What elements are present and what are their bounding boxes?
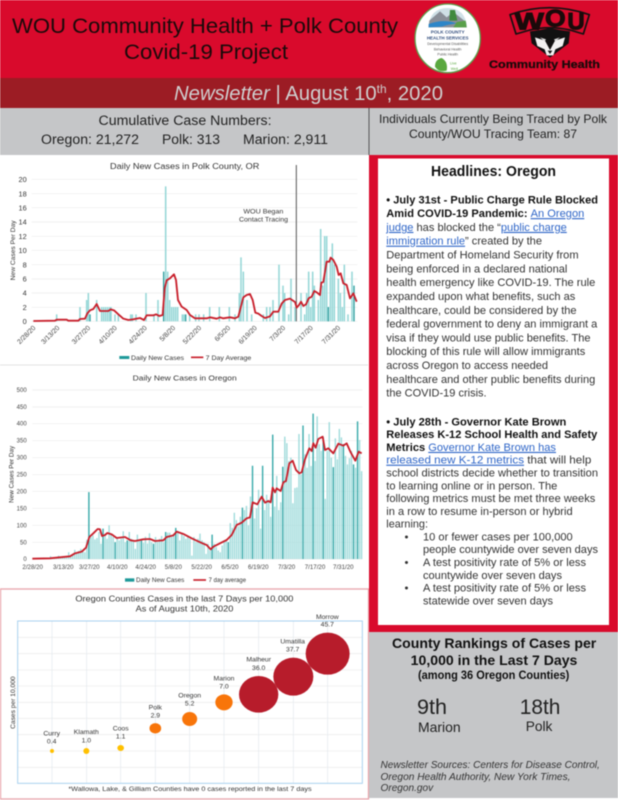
bubble chart: Oregon counties cases per 10,000: Oregon Counties Cases in the last 7 Days per 10,000 bbox=[75, 595, 294, 604]
text block: public charge rule: Amid COVID-19 Pandemic: An Oregon bbox=[386, 208, 584, 220]
panel: cumulative case numbers: Polk: 313 bbox=[162, 132, 220, 147]
line chart: daily new cases in Polk County: 7/3/20 bbox=[269, 325, 287, 343]
bar and line chart: daily new cases in Oregon: New Cases Per Day bbox=[9, 445, 16, 503]
text block: K-12 metrics: A test positivity rate of 5% or less bbox=[423, 583, 586, 595]
text block: K-12 metrics: • bbox=[404, 583, 408, 595]
text block: K-12 metrics: school districts decide whether to transition bbox=[386, 468, 598, 480]
line chart: daily new cases in Polk County: 14 bbox=[19, 218, 27, 227]
text block: public charge rule: federal government to deny an immigrant a bbox=[386, 319, 598, 331]
bubble chart: Oregon counties cases per 10,000: Polk bbox=[149, 704, 163, 711]
bar and line chart: daily new cases in Oregon: 5/22/20 bbox=[191, 564, 213, 571]
panel: individuals being traced: Individuals Currently Being Traced by Polk bbox=[379, 112, 608, 126]
text block: public charge rule: blocking of this rule will allow immigrants bbox=[386, 346, 586, 358]
bubble chart: Oregon counties cases per 10,000: 0.4 bbox=[47, 739, 57, 746]
icon: Polk County Health Services logo: HEALTH SERVICES bbox=[427, 36, 469, 41]
text block: public charge rule: Department of Homeland Security from bbox=[386, 250, 579, 262]
bar and line chart: daily new cases in Oregon: 3/27/20 bbox=[79, 564, 100, 571]
panel: cumulative case numbers: Marion: 2,911 bbox=[243, 132, 328, 147]
panel: county rankings bbox=[369, 632, 618, 798]
bar and line chart: daily new cases in Oregon: 4/10/20 bbox=[107, 564, 128, 571]
line chart: daily new cases in Polk County: Contact Tracing bbox=[239, 216, 288, 223]
title: Covid-19 Project bbox=[124, 40, 288, 64]
newsletter date band: Newsletter | August 10 bbox=[174, 82, 378, 105]
icon: WOU wolf logo: Community Health bbox=[489, 59, 600, 71]
panel: cumulative case numbers bbox=[0, 108, 369, 155]
bubble chart: Oregon counties cases per 10,000: Klamath bbox=[74, 729, 99, 736]
line chart: daily new cases in Polk County: 2 bbox=[23, 303, 27, 312]
bar and line chart: daily new cases in Oregon: 7/17/20 bbox=[305, 564, 326, 571]
line chart: daily new cases in Polk County: WOU Began bbox=[243, 208, 284, 215]
bubble chart: Oregon counties cases per 10,000: Umatilla bbox=[280, 638, 305, 645]
text block: K-12 metrics: Metrics Governor Kate Brown has bbox=[386, 442, 556, 454]
bar and line chart: daily new cases in Oregon: 400 bbox=[17, 422, 27, 428]
newsletter date band: th bbox=[377, 82, 387, 96]
line chart: daily new cases in Polk County: 6/19/20 bbox=[238, 325, 259, 346]
text block: newsletter sources bbox=[380, 759, 600, 794]
text block: public charge rule: immigration rule” created by the bbox=[386, 236, 542, 248]
line chart: daily new cases in Polk County: 7 Day Average bbox=[206, 355, 252, 362]
line chart: daily new cases in Polk County: 3/13/20 bbox=[40, 325, 62, 346]
heading: county rankings bbox=[392, 635, 597, 682]
bubble chart: Oregon counties cases per 10,000: 7.0 bbox=[219, 684, 229, 691]
icon: Polk County Health Services logo: Well bbox=[451, 67, 458, 71]
heading: headlines: Headlines: Oregon bbox=[431, 164, 556, 180]
stat: Polk rank: 18th bbox=[520, 696, 560, 719]
text block: newsletter sources: Oregon.gov bbox=[380, 782, 434, 794]
text block: public charge rule: visa if they would use public benefits. The bbox=[386, 332, 591, 344]
text block: public charge rule: expanded upon what benefits, such as bbox=[386, 291, 576, 303]
text block: newsletter sources: Oregon Health Authority, New York Times, bbox=[380, 771, 570, 783]
bar and line chart: daily new cases in Oregon: 0 bbox=[23, 557, 27, 563]
bubble chart: Oregon counties cases per 10,000: Oregon bbox=[178, 693, 201, 700]
bubble chart: Oregon counties cases per 10,000: 36.0 bbox=[252, 665, 266, 672]
line chart: daily new cases in Polk County: 10 bbox=[19, 246, 27, 255]
bubble chart: Oregon counties cases per 10,000: Cases per 10,000 bbox=[10, 676, 17, 729]
text block: K-12 metrics: released new K-12 metrics that will help bbox=[386, 455, 591, 467]
text block: K-12 metrics bbox=[386, 416, 598, 607]
line chart: daily new cases in Polk County: 5/8/20 bbox=[159, 325, 177, 343]
bubble chart: Oregon counties cases per 10,000: 2.9 bbox=[151, 713, 160, 720]
text block: public charge rule: being enforced in a declared national bbox=[386, 263, 567, 275]
bar and line chart: daily new cases in Oregon: 3/13/20 bbox=[53, 564, 74, 571]
bar and line chart: daily new cases in Oregon: 6/19/20 bbox=[248, 564, 269, 571]
title: WOU Community Health + Polk County bbox=[12, 14, 398, 38]
icon: Polk County Health Services logo: Behavioral Health bbox=[434, 47, 461, 51]
line chart: daily new cases in Polk County: 7/17/20 bbox=[294, 325, 315, 346]
text block: public charge rule: healthcare, could be considered by the bbox=[386, 305, 577, 317]
line chart: daily new cases in Polk County: 6 bbox=[23, 275, 27, 284]
text block: K-12 metrics: countywide over seven days bbox=[423, 570, 562, 582]
text block: public charge rule: the COVID-19 crisis. bbox=[386, 388, 487, 400]
text block: K-12 metrics: people countywide over seven days bbox=[423, 544, 598, 556]
bar and line chart: daily new cases in Oregon: 300 bbox=[17, 456, 27, 462]
stat: Marion rank: 9th bbox=[417, 696, 447, 719]
header banner bbox=[0, 0, 618, 78]
bar and line chart: daily new cases in Oregon: 4/24/20 bbox=[135, 564, 157, 571]
bubble chart: Oregon counties cases per 10,000: *Wallowa, Lake, & Gilliam Counties have 0 cases reported in the last 7 days bbox=[68, 786, 312, 793]
line chart: daily new cases in Polk County: 6/5/20 bbox=[214, 325, 232, 343]
stat: Polk rank bbox=[520, 696, 560, 734]
bubble chart: Oregon counties cases per 10,000: 37.7 bbox=[286, 647, 300, 654]
text block: K-12 metrics: Releases K-12 School Health and Safety bbox=[386, 429, 598, 441]
icon: Polk County Health Services logo: Public Health bbox=[437, 52, 458, 56]
line chart: daily new cases in Polk County: 0 bbox=[23, 317, 27, 326]
newsletter date band bbox=[0, 78, 618, 108]
text block: newsletter sources: Newsletter Sources: Centers for Disease Control, bbox=[380, 759, 600, 771]
icon: Polk County Health Services logo bbox=[415, 4, 480, 73]
stat: Polk rank: Polk bbox=[526, 718, 553, 734]
bar and line chart: daily new cases in Oregon: 50 bbox=[20, 540, 27, 546]
heading: county rankings: County Rankings of Cases per bbox=[392, 635, 597, 651]
text block: public charge rule: • July 31st - Public Charge Rule Blocked bbox=[386, 194, 598, 206]
text block: K-12 metrics: following metrics must be met three weeks bbox=[386, 493, 596, 505]
text block: K-12 metrics: in a row to resume in-person or hybrid bbox=[386, 506, 573, 518]
text block: public charge rule bbox=[385, 194, 598, 400]
text block: K-12 metrics: • July 28th - Governor Kate Brown bbox=[386, 416, 566, 428]
line chart: daily new cases in Polk County: 20 bbox=[19, 175, 27, 184]
bar and line chart: daily new cases in Oregon: 7/31/20 bbox=[333, 564, 354, 571]
text block: K-12 metrics: • bbox=[404, 531, 408, 543]
panel: individuals being traced bbox=[368, 108, 618, 155]
text block: K-12 metrics: 10 or fewer cases per 100,000 bbox=[423, 531, 573, 543]
line chart: daily new cases in Polk County: 7/31/20 bbox=[321, 325, 342, 346]
line chart: daily new cases in Polk County: 8 bbox=[23, 260, 27, 269]
text block: K-12 metrics: A test positivity rate of 5% or less bbox=[423, 557, 586, 569]
bubble chart: Oregon counties cases per 10,000: 45.7 bbox=[321, 622, 334, 629]
line chart: daily new cases in Polk County: 4 bbox=[23, 289, 27, 298]
bar and line chart: daily new cases in Oregon: 100 bbox=[17, 523, 27, 529]
stat: Marion rank: Marion bbox=[418, 719, 461, 735]
bar and line chart: daily new cases in Oregon: 2/28/20 bbox=[22, 564, 44, 571]
bar and line chart: daily new cases in Oregon: 200 bbox=[17, 489, 27, 495]
text block: K-12 metrics: statewide over seven days bbox=[423, 595, 553, 607]
bubble chart: Oregon counties cases per 10,000: 1.1 bbox=[116, 733, 126, 740]
bubble chart: Oregon counties cases per 10,000: 5.2 bbox=[185, 701, 195, 708]
newsletter date band: , 2020 bbox=[387, 82, 443, 105]
bubble chart: Oregon counties cases per 10,000: Malheur bbox=[246, 657, 272, 664]
heading: county rankings: (among 36 Oregon Counties) bbox=[418, 670, 569, 682]
panel: cumulative case numbers: Cumulative Case Numbers: bbox=[98, 113, 272, 128]
bubble chart: Oregon counties cases per 10,000 bbox=[0, 589, 368, 799]
text block: K-12 metrics: learning: bbox=[386, 519, 428, 531]
line chart: daily new cases in Polk County: 16 bbox=[19, 203, 27, 212]
title bbox=[12, 14, 398, 64]
bar and line chart: daily new cases in Oregon: Daily New Cases bbox=[136, 578, 184, 584]
icon: WOU wolf logo bbox=[489, 6, 600, 71]
text block: public charge rule: judge has blocked the “public charge bbox=[385, 222, 567, 234]
line chart: daily new cases in Polk County: 12 bbox=[19, 232, 27, 241]
text block: K-12 metrics: • bbox=[404, 557, 408, 569]
icon: Polk County Health Services logo: Developmental Disabilities bbox=[427, 42, 468, 46]
line chart: daily new cases in Polk County: New Cases Per Day bbox=[10, 220, 17, 280]
text block: public charge rule: health emergency like COVID-19. The rule bbox=[386, 277, 595, 289]
text block: K-12 metrics: to learning online or in person. The bbox=[386, 480, 557, 492]
bar and line chart: daily new cases in Oregon bbox=[9, 374, 362, 584]
line chart: daily new cases in Polk County: 4/24/20 bbox=[128, 325, 149, 346]
panel: headlines Oregon bbox=[369, 155, 618, 632]
bar and line chart: daily new cases in Oregon: 450 bbox=[17, 405, 27, 411]
line chart: daily new cases in Polk County: Daily New Cases bbox=[131, 355, 185, 362]
bar and line chart: daily new cases in Oregon: 500 bbox=[17, 388, 27, 394]
icon: WOU wolf logo: O bbox=[545, 6, 566, 33]
line chart: daily new cases in Polk County: 18 bbox=[19, 189, 27, 198]
bubble chart: Oregon counties cases per 10,000: As of August 10th, 2020 bbox=[136, 605, 234, 614]
bar and line chart: daily new cases in Oregon: 350 bbox=[17, 439, 27, 445]
panel: cumulative case numbers: Oregon: 21,272 bbox=[41, 132, 139, 147]
text block: public charge rule: across Oregon to access needed bbox=[386, 360, 548, 372]
bar and line chart: daily new cases in Oregon: 7/3/20 bbox=[278, 564, 296, 571]
stat: Marion rank bbox=[417, 696, 461, 735]
icon: Polk County Health Services logo: POLK COUNTY bbox=[431, 29, 466, 34]
icon: Polk County Health Services logo: Live bbox=[450, 61, 457, 65]
line chart: daily new cases in Polk County: 4/10/20 bbox=[98, 325, 119, 346]
bubble chart: Oregon counties cases per 10,000: Curry bbox=[43, 731, 61, 738]
line chart: daily new cases in Polk County: Daily New Cases in Polk County, OR bbox=[110, 161, 259, 171]
panel: individuals being traced: County/WOU Tracing Team: 87 bbox=[409, 127, 577, 141]
bar and line chart: daily new cases in Oregon: Daily New Cases in Oregon bbox=[133, 374, 237, 383]
bubble chart: Oregon counties cases per 10,000: Marion bbox=[214, 675, 235, 682]
bar and line chart: daily new cases in Oregon: 5/8/20 bbox=[165, 564, 182, 571]
icon: WOU wolf logo: W bbox=[515, 8, 544, 35]
bar and line chart: daily new cases in Oregon: 150 bbox=[17, 506, 27, 512]
bar and line chart: daily new cases in Oregon: 7 day average bbox=[209, 578, 247, 584]
bubble chart: Oregon counties cases per 10,000: 1.0 bbox=[82, 737, 91, 744]
text block: public charge rule: healthcare and other public benefits during bbox=[386, 374, 595, 386]
bubble chart: Oregon counties cases per 10,000: Morrow bbox=[316, 614, 339, 621]
icon: WOU wolf logo: U bbox=[567, 8, 585, 35]
line chart: daily new cases in Polk County bbox=[10, 161, 357, 362]
line chart: daily new cases in Polk County: 5/22/20 bbox=[182, 325, 203, 346]
heading: county rankings: 10,000 in the Last 7 Days bbox=[411, 652, 578, 668]
line chart: daily new cases in Polk County: 3/27/20 bbox=[71, 325, 92, 346]
line chart: daily new cases in Polk County: 2/28/20 bbox=[16, 325, 38, 346]
bubble chart: Oregon counties cases per 10,000: Coos bbox=[113, 725, 129, 732]
bar and line chart: daily new cases in Oregon: 6/5/20 bbox=[221, 564, 239, 571]
bar and line chart: daily new cases in Oregon: 250 bbox=[17, 473, 27, 479]
